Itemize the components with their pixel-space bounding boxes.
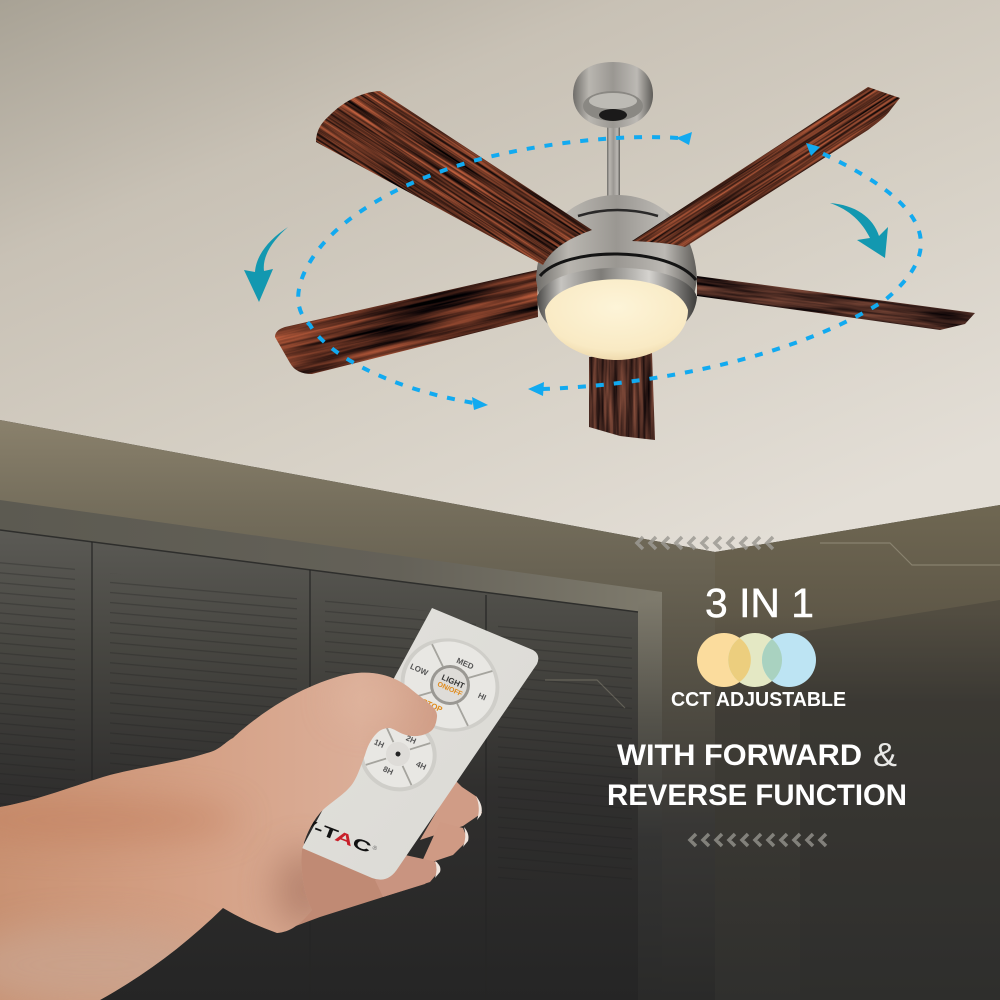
brand logo: V-T AC [297, 814, 374, 857]
closet with louvered doors [0, 500, 662, 1000]
lamp rim [537, 254, 697, 332]
ceiling canopy [573, 62, 653, 128]
button labels: HI [477, 691, 488, 702]
button labels: LOW [409, 662, 430, 678]
left wall [0, 420, 715, 1000]
downrod [607, 115, 620, 197]
index finger [420, 780, 482, 840]
button labels [409, 656, 488, 714]
decorative tech line lower [545, 680, 625, 708]
timer button ring [347, 704, 449, 804]
headline line two: REVERSE FUNCTION [607, 779, 907, 812]
upper forearm warm tone [0, 798, 240, 842]
motor housing [536, 195, 697, 316]
skin base [0, 660, 450, 1000]
small blue arrowheads [472, 132, 820, 410]
fingers and palm behind remote [260, 780, 482, 933]
dashed arc: top and left [298, 137, 678, 403]
ceiling [0, 0, 1000, 552]
ring finger [375, 855, 440, 897]
fan blade right [697, 276, 975, 330]
ceiling fan [222, 0, 1000, 455]
CCT colour circles [697, 633, 816, 687]
thumb highlight [335, 680, 405, 720]
chevron row bottom [690, 834, 826, 846]
fan blade left [275, 270, 538, 374]
decorative tech line upper [820, 543, 1000, 565]
ampersand: & [873, 736, 897, 773]
button labels: MED [455, 656, 475, 672]
button labels: LIGHT [440, 673, 466, 691]
fan blade top right [632, 87, 900, 247]
middle finger [420, 822, 468, 866]
lower forearm cool tone [0, 926, 192, 1000]
rotation dashed path [298, 137, 921, 403]
timer labels: 1H [373, 738, 386, 750]
timer labels: 4H [415, 760, 428, 772]
timer labels [373, 734, 428, 777]
remote control [297, 608, 538, 880]
fan blade top left [316, 91, 592, 265]
remote body [302, 608, 538, 880]
finger nails [435, 796, 482, 878]
large teal arrow left [244, 227, 288, 302]
dashed arc: bottom and right [542, 150, 921, 389]
button labels: STOP [420, 697, 444, 714]
heading: 3 in 1: 3 IN 1 [705, 580, 814, 626]
large teal arrow right [830, 203, 888, 258]
headline line one: WITH FORWARD [617, 739, 862, 772]
hand and arm [0, 660, 450, 1000]
main button ring [386, 623, 514, 747]
chevron row top [637, 537, 773, 549]
registered mark: ® [371, 844, 378, 853]
timer labels: 8H [382, 765, 395, 777]
far right ceiling step [800, 600, 1000, 1000]
glass lamp shade [545, 279, 688, 360]
palm shadow [275, 850, 335, 930]
fan blade bottom [589, 353, 655, 440]
button labels: ON/OFF [436, 681, 464, 698]
right wall [715, 505, 1000, 1000]
label: CCT adjustable: CCT ADJUSTABLE [671, 688, 846, 711]
timer labels: 2H [405, 734, 418, 746]
palm under remote [260, 840, 440, 933]
